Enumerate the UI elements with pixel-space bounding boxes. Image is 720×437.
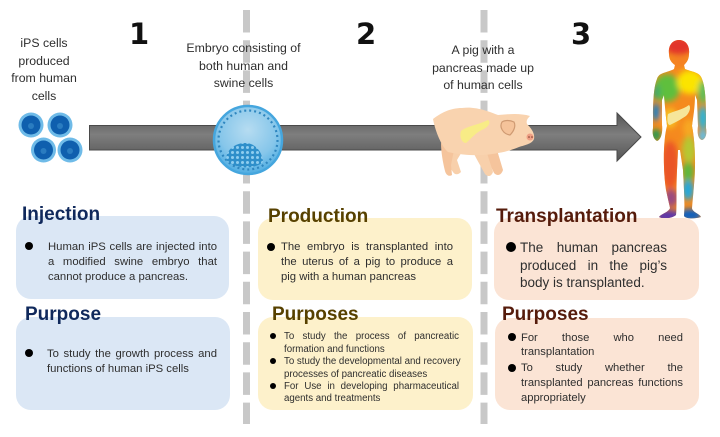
label: embryo [186, 41, 301, 90]
text: purpose: functions of human iPS cells [47, 363, 189, 375]
bullet [506, 242, 516, 252]
label: pig [432, 43, 534, 92]
icon: human body [652, 40, 706, 218]
text: production [281, 241, 454, 283]
bullet [25, 242, 33, 250]
panel: purposes of production [258, 304, 473, 410]
text: transplantation [520, 240, 667, 290]
text: purposes list: For Use in developing pharmaceutical [284, 381, 459, 392]
heading: purposes: Purposes [272, 304, 359, 325]
panel: injection [16, 204, 229, 299]
text: injection [48, 241, 217, 283]
label: iPS cells: produced [18, 54, 70, 68]
text: purposes list: For those who need [521, 332, 683, 344]
bullet [267, 243, 275, 251]
step number 2: 2 [356, 17, 376, 51]
text: purposes list [521, 332, 683, 404]
text: injection: Human iPS cells are injected into [48, 241, 217, 253]
label: pig: A pig with a [452, 43, 514, 57]
text: production: the uterus of a pig to produce a [281, 256, 453, 268]
text: purposes list [284, 331, 461, 404]
label: iPS cells: iPS cells [20, 36, 68, 50]
bullet [270, 333, 276, 339]
panel: purposes of transplantation [495, 304, 699, 410]
panel: transplantation [494, 206, 699, 300]
text: production: The embryo is transplanted into [281, 241, 453, 253]
heading: production: Production [268, 206, 368, 227]
heading: injection: Injection [22, 204, 100, 225]
timeline arrow [90, 113, 641, 161]
heading: transplantation: Transplantation [496, 206, 637, 227]
step number 1: 1 [129, 17, 149, 51]
text: purpose: To study the growth process and [47, 348, 217, 360]
bullet [270, 383, 276, 389]
label: iPS cells: from human [11, 71, 77, 85]
text: purposes list: agents and treatments [284, 393, 380, 404]
label: embryo: Embryo consisting of [186, 41, 301, 55]
icon: embryo [214, 106, 282, 174]
text: injection: cannot produce a pancreas. [48, 271, 188, 283]
dashed divider 1 [243, 10, 250, 424]
heading: purpose: Purpose [25, 304, 101, 325]
text: purposes list: To study whether the [521, 362, 683, 374]
bullet [25, 349, 33, 357]
text: transplantation: The human pancreas [520, 240, 667, 255]
heading: purposes: Purposes [502, 304, 589, 325]
text: production: pig with a human pancreas [281, 271, 416, 283]
label: iPS cells [11, 36, 77, 102]
bullet [508, 364, 516, 372]
label: embryo: swine cells [214, 76, 273, 90]
panel: production [258, 206, 472, 300]
text: transplantation: body is transplanted. [520, 275, 645, 290]
text: purposes list: formation and functions [284, 344, 385, 355]
text: purposes list: transplantation [521, 346, 594, 358]
bullet [270, 358, 276, 364]
text: purposes list: To study the process of pancreatic [284, 331, 459, 342]
text: transplantation: produced in the pig’s [520, 258, 667, 273]
dashed divider 2 [480, 10, 488, 424]
panel: purpose [16, 304, 230, 410]
text: purpose [47, 348, 217, 375]
step number 3: 3 [571, 17, 591, 51]
label: pig: of human cells [443, 78, 523, 92]
label: iPS cells: cells [32, 88, 56, 102]
text: injection: a modified swine embryo that [48, 256, 217, 268]
text: purposes list: To study the developmental and recovery [284, 356, 461, 367]
icon: pig [433, 108, 534, 176]
icon: iPS cells [18, 112, 82, 162]
label: pig: pancreas made up [432, 60, 534, 74]
bullet [508, 333, 516, 341]
label: embryo: both human and [199, 58, 288, 72]
text: purposes list: appropriately [521, 392, 586, 404]
text: purposes list: processes of pancreatic diseases [284, 369, 427, 380]
text: purposes list: transplanted pancreas functions [521, 377, 683, 389]
